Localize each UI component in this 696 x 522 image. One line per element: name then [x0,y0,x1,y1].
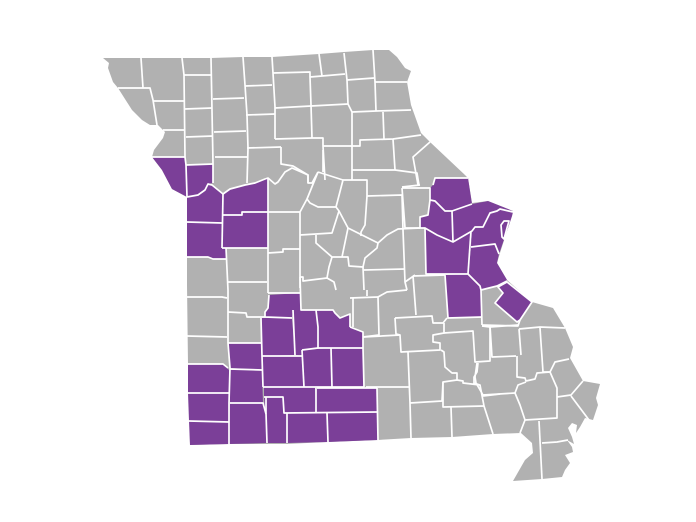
highlighted counties: purple [152,157,532,445]
state silhouette: grey counties [103,50,600,481]
county borders [118,50,589,479]
